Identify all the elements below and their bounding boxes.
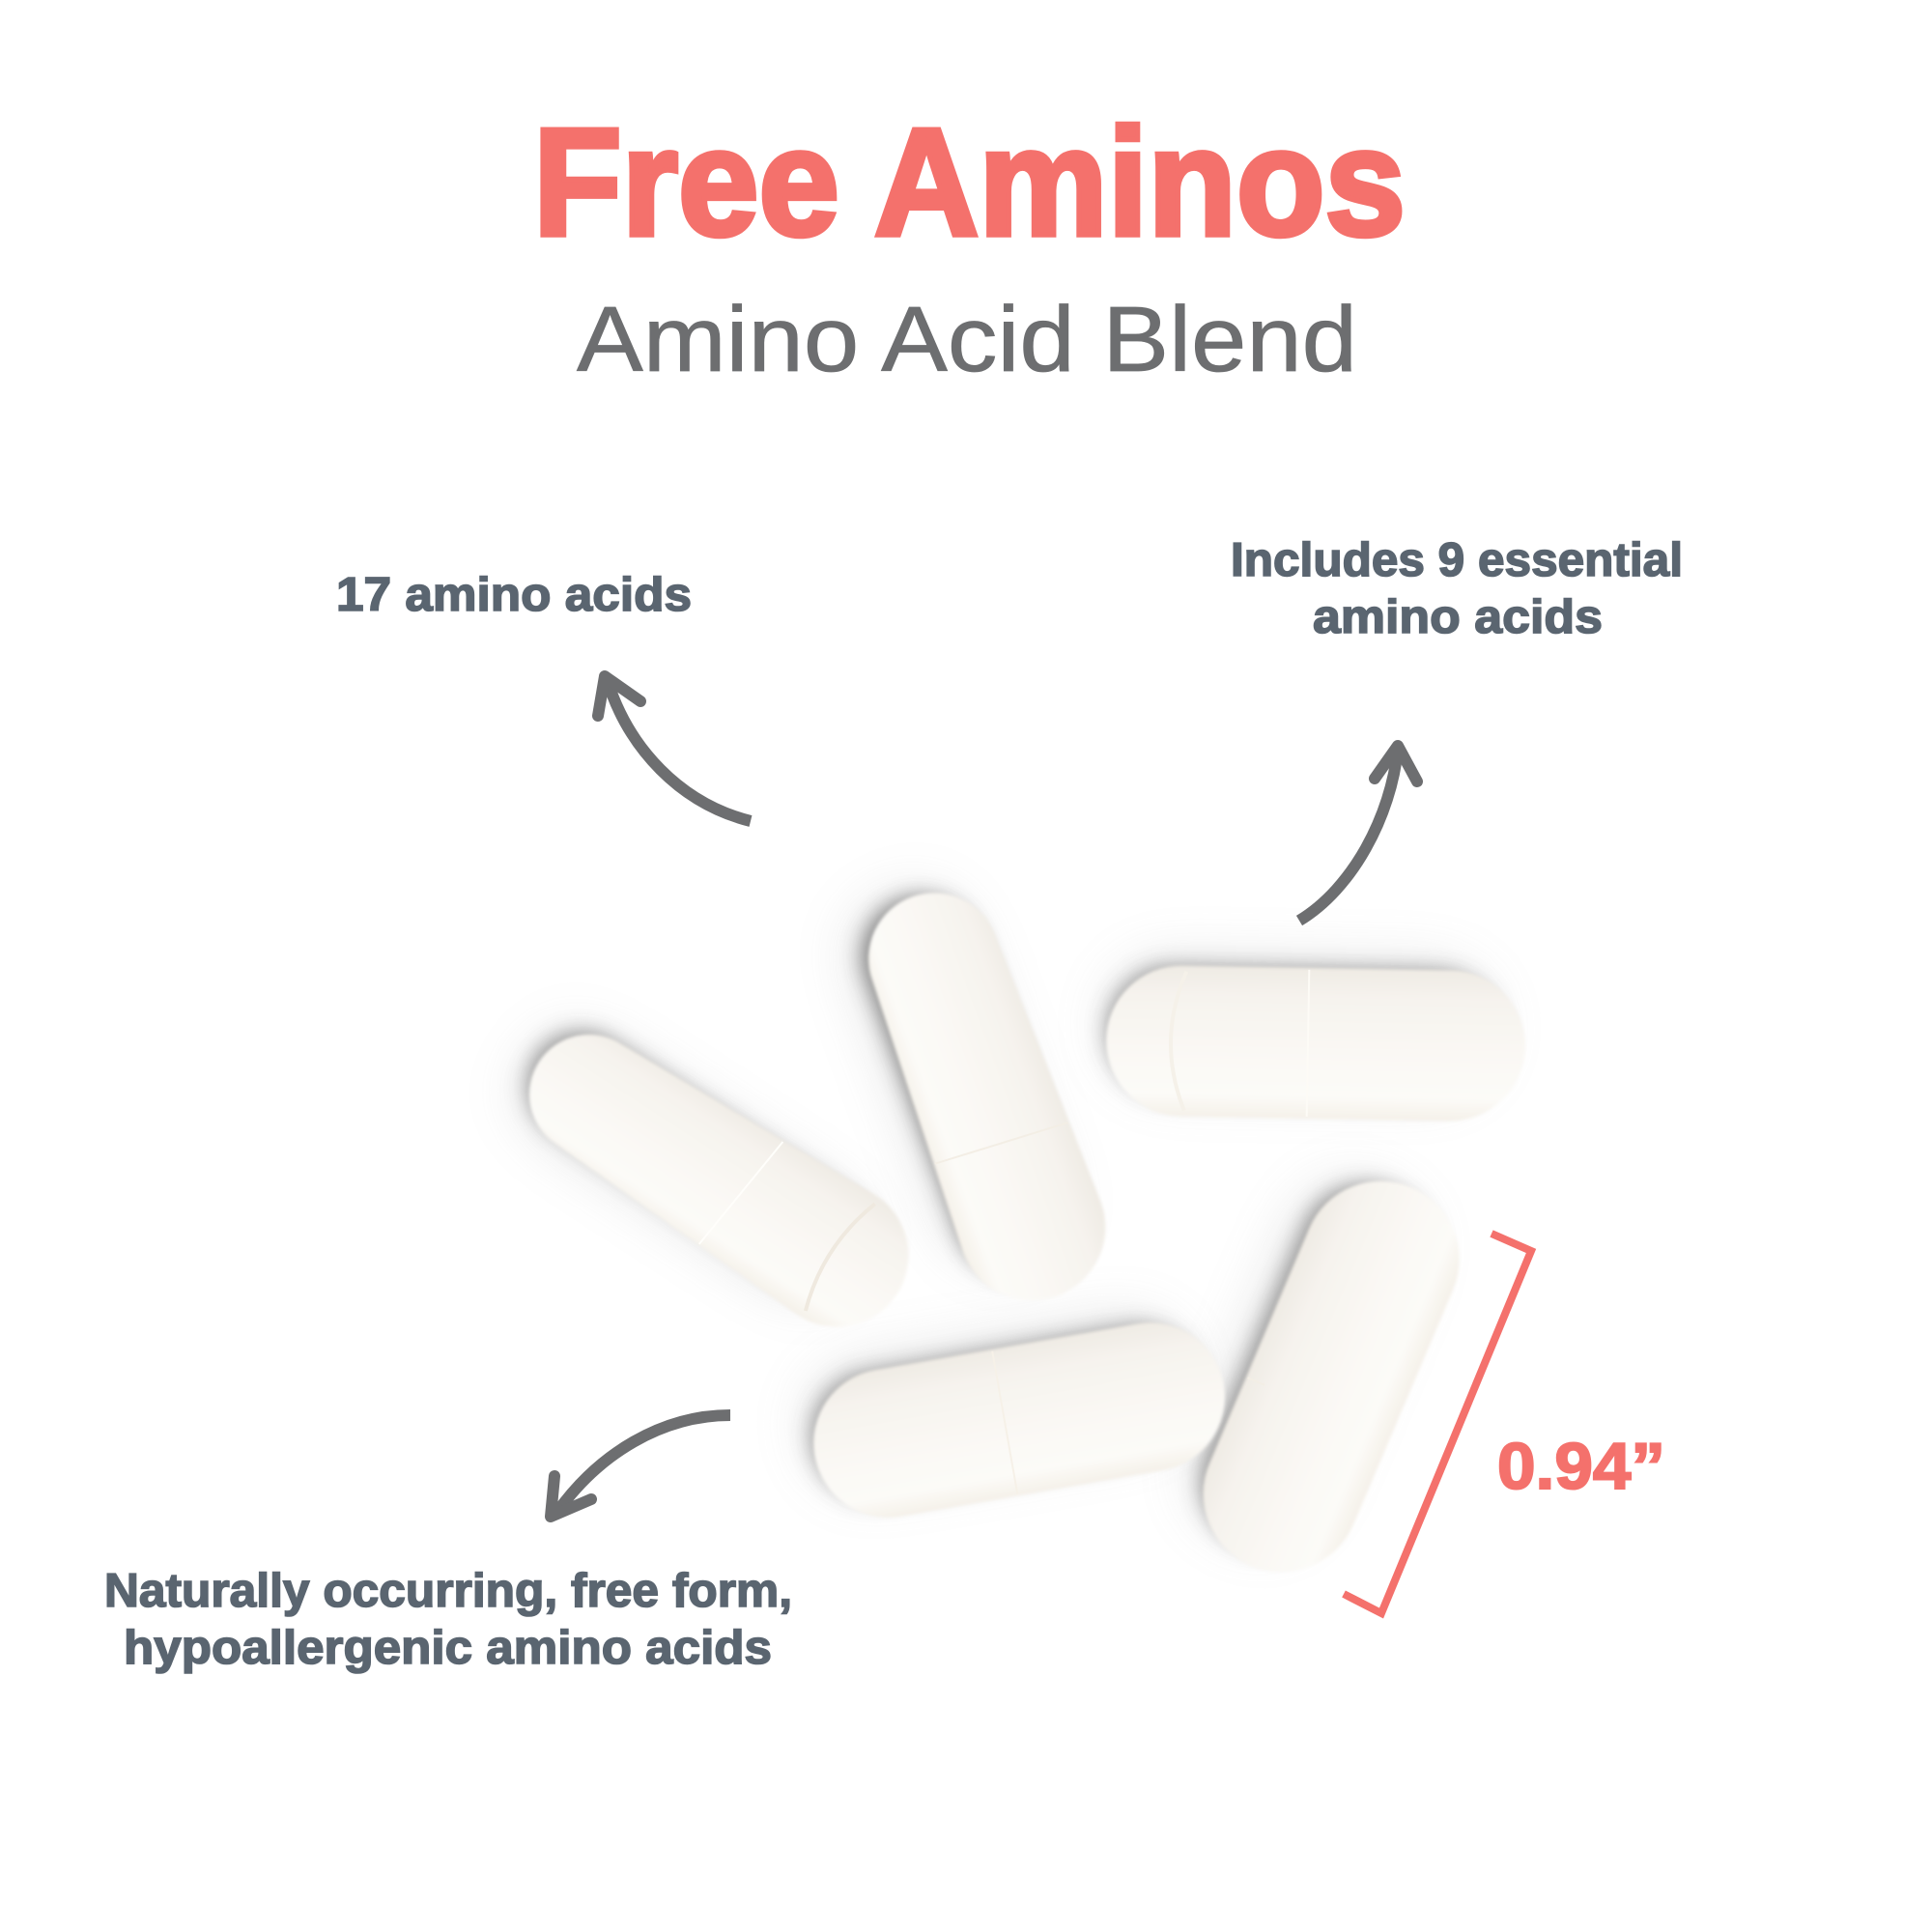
capsule: upper left bbox=[500, 1002, 936, 1354]
callout: includes 9 essential amino acids: amino acids bbox=[1313, 591, 1603, 643]
capsule: top right bbox=[1105, 964, 1526, 1122]
callout: 17 amino acids: 17 amino acids bbox=[336, 569, 692, 621]
capsule: centre bbox=[842, 871, 1126, 1321]
size label: 0.94” bbox=[1497, 1430, 1665, 1503]
arrow: to naturally occurring bbox=[551, 1415, 730, 1517]
callout: naturally occurring: Naturally occurring, free form, bbox=[104, 1565, 792, 1617]
capsule: lower right bbox=[1179, 1156, 1484, 1597]
capsule: lower middle bbox=[802, 1311, 1236, 1529]
arrow: to includes 9 essential bbox=[1299, 746, 1417, 921]
callout: naturally occurring bbox=[104, 1565, 792, 1674]
callout: naturally occurring: hypoallergenic amino acids bbox=[124, 1622, 772, 1674]
callout: includes 9 essential amino acids: Includes 9 essential bbox=[1231, 534, 1683, 586]
size bracket bbox=[1344, 1234, 1531, 1613]
callout: includes 9 essential amino acids bbox=[1231, 534, 1683, 643]
title: Free Aminos bbox=[533, 98, 1406, 268]
subtitle: Amino Acid Blend bbox=[577, 288, 1357, 391]
capsule shadows bbox=[497, 874, 1503, 1571]
arrow: to 17 amino acids bbox=[598, 676, 751, 821]
capsules photo group bbox=[497, 871, 1526, 1597]
